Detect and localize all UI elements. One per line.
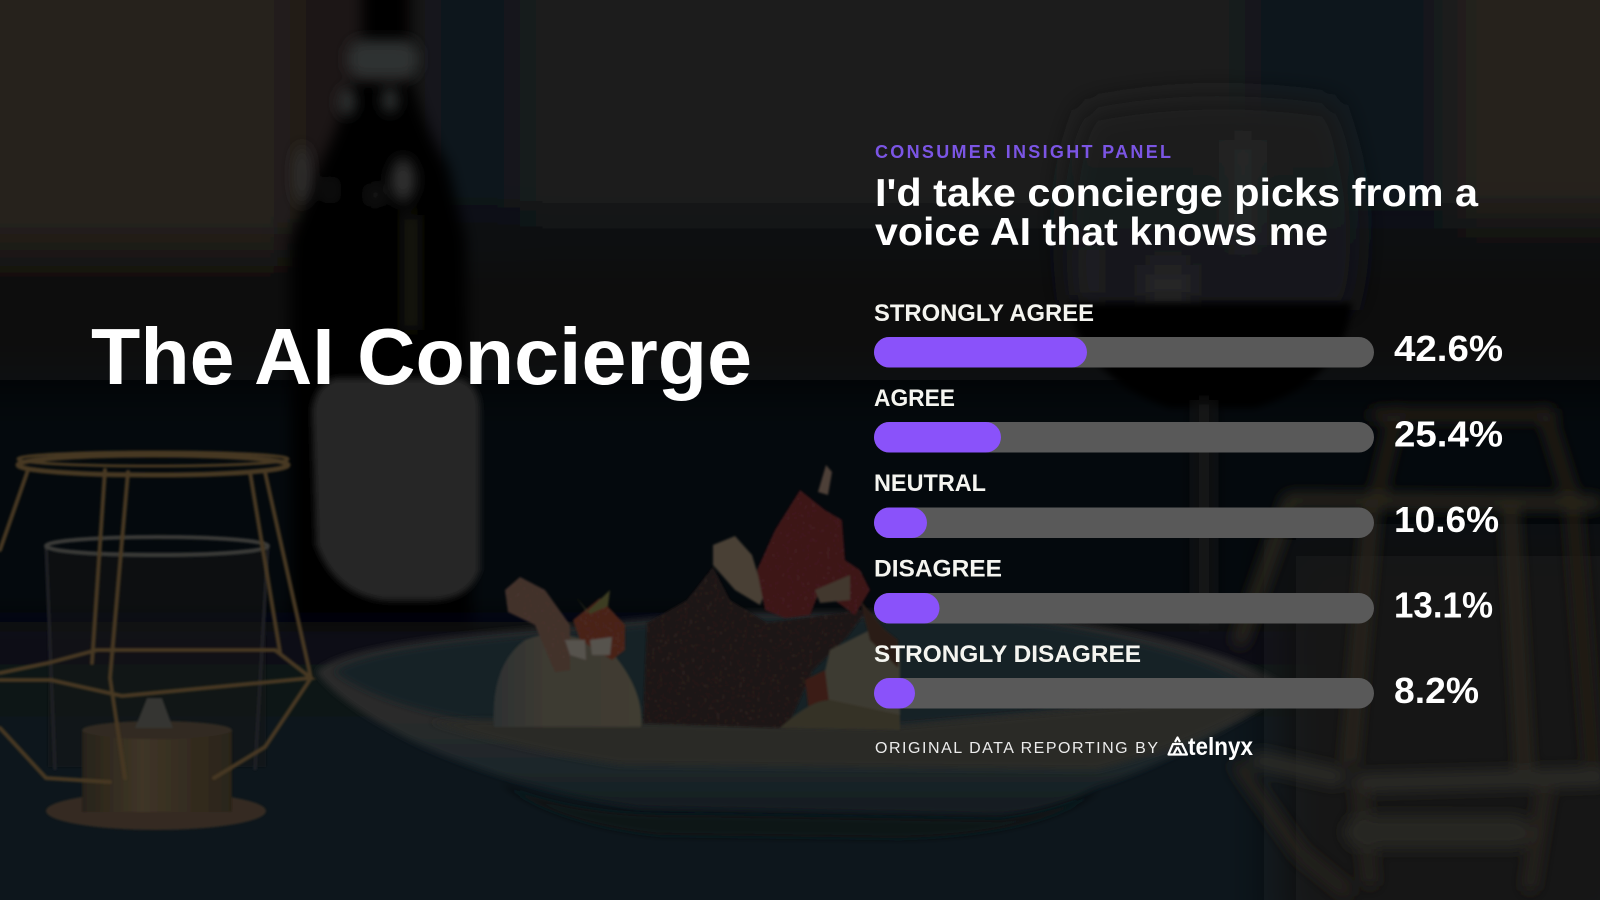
- dark meat: [643, 567, 867, 728]
- dessert on plate: [494, 465, 900, 730]
- bar row: agree: [874, 385, 1503, 454]
- strawberry: [573, 598, 625, 660]
- bar row: neutral: 10.6%: [1394, 499, 1499, 540]
- eyebrow label: CONSUMER INSIGHT PANEL: [875, 142, 1171, 162]
- bar row: disagree: [874, 556, 1493, 626]
- survey question heading: voice AI that knows me: [875, 211, 1328, 254]
- table surface: [0, 622, 1600, 900]
- wine bottle with white label: [290, 0, 480, 640]
- bar row: disagree: DISAGREE: [874, 556, 1002, 582]
- bar row: strongly agree: [874, 300, 1503, 369]
- footer attribution with telnyx logo: telnyx: [1188, 733, 1253, 761]
- bar row: strongly disagree: [874, 641, 1479, 711]
- wire frame: [0, 452, 311, 782]
- cream scoop left: [494, 634, 641, 727]
- glass votive: [46, 537, 268, 770]
- tan topping: [713, 536, 764, 605]
- bar row: disagree: 13.1%: [1394, 584, 1493, 626]
- dinner plate: [316, 612, 1290, 838]
- bar row: neutral: NEUTRAL: [874, 470, 986, 497]
- survey question heading: I'd take concierge picks from a: [875, 172, 1478, 215]
- wafer garnish: [505, 577, 570, 672]
- bar row: strongly disagree: 8.2%: [1394, 670, 1479, 711]
- candle: [46, 698, 266, 830]
- red berries: [757, 490, 870, 618]
- bar row: agree: AGREE: [874, 385, 955, 412]
- bar row: agree: 25.4%: [1394, 414, 1503, 454]
- right blurred lanterns: [1239, 413, 1600, 900]
- bar row: strongly agree: 42.6%: [1394, 328, 1503, 369]
- footer attribution with telnyx logo: [875, 733, 1253, 761]
- survey question heading: [875, 172, 1478, 254]
- icon: telnyx logo mark: [1168, 738, 1187, 754]
- bar row: strongly disagree: STRONGLY DISAGREE: [874, 641, 1141, 668]
- right tan and cream: [815, 575, 850, 603]
- left candle lantern: [0, 452, 311, 830]
- bar row: strongly agree: STRONGLY AGREE: [874, 300, 1094, 327]
- wine glass: [1063, 96, 1360, 630]
- footer attribution with telnyx logo: ORIGINAL DATA REPORTING BY: [875, 740, 1158, 757]
- bar row: neutral: [874, 470, 1499, 540]
- main title: The AI Concierge: [91, 312, 752, 401]
- wall and banquette backdrop: [0, 0, 1600, 380]
